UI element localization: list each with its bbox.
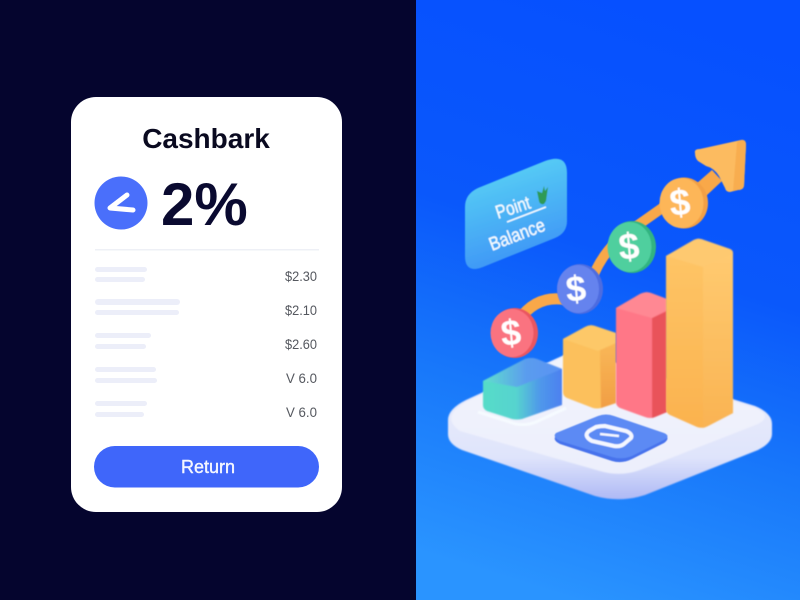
row 3 [95, 333, 317, 352]
coin: blue [557, 264, 603, 314]
row 1: $2.30 [285, 268, 317, 284]
label: Point: Point [493, 191, 533, 223]
coin: green: $ [617, 225, 641, 268]
divider [95, 249, 319, 250]
bar: red [616, 292, 667, 418]
row 5: V 6.0 [286, 404, 317, 420]
icon: green check mark [537, 186, 548, 204]
coin: red: $ [499, 311, 523, 354]
coin: red [490, 308, 538, 358]
row 4 [95, 367, 317, 386]
row 3: $2.60 [285, 336, 317, 352]
icon: blue circle with check [94, 176, 148, 230]
tile: blue app icon [555, 414, 668, 462]
underline [507, 207, 546, 222]
left dark background [0, 0, 416, 600]
button: Return [94, 446, 319, 488]
panel: point balance card [465, 159, 567, 269]
big rate: 2%: 2% [161, 171, 248, 238]
row 2: $2.10 [285, 302, 317, 318]
teal block base outline [478, 408, 566, 425]
panel: isometric chart illustration [448, 140, 772, 499]
coin: blue: $ [564, 267, 588, 310]
bar: teal block [483, 358, 562, 420]
row 2 [95, 299, 317, 318]
row 4: V 6.0 [286, 370, 317, 386]
label: Balance: Balance [486, 214, 548, 255]
button: Return: Return [181, 457, 235, 477]
bar: yellow [563, 325, 616, 408]
icon: rounded glyph on tile [587, 426, 631, 446]
platform base [448, 350, 772, 499]
coin: orange [660, 178, 708, 228]
coin: green [608, 221, 656, 273]
coin: orange: $ [668, 181, 692, 224]
arrow: rising trend line [519, 140, 746, 320]
card surface [71, 97, 342, 512]
row 5 [95, 401, 317, 420]
row 1 [95, 267, 317, 284]
right blue background [416, 0, 800, 600]
bar: orange tall [666, 239, 733, 428]
heading: Cashbark: Cashbark [142, 123, 270, 154]
panel: cashback card [71, 97, 342, 512]
